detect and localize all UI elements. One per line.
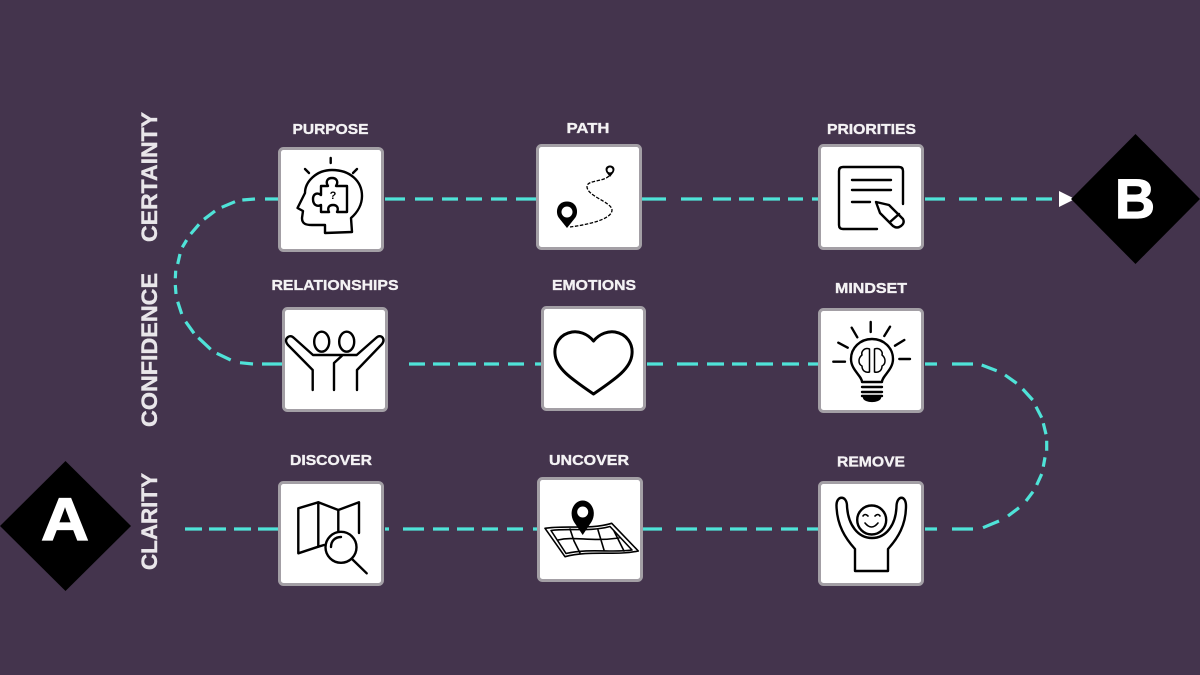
- icon: heart: [555, 332, 632, 394]
- icon: route with pins: [557, 166, 614, 228]
- icon: note and pencil: [839, 167, 904, 229]
- card: purpose: [280, 122, 382, 250]
- end diamond B: [1071, 134, 1200, 264]
- heading: purpose: PURPOSE: [292, 122, 369, 138]
- card: remove: [820, 454, 922, 584]
- side label: confidence: CONFIDENCE: [137, 273, 162, 427]
- card: uncover: [538, 453, 642, 580]
- card: mindset: [820, 281, 922, 412]
- heading: mindset: MINDSET: [835, 281, 907, 297]
- start diamond A: A: [41, 486, 89, 553]
- card: discover: [280, 453, 382, 584]
- card: path: [538, 121, 640, 248]
- card: emotions: [542, 278, 644, 410]
- heading: remove: REMOVE: [837, 454, 905, 470]
- heading: discover: DISCOVER: [290, 453, 373, 469]
- heading: path: PATH: [566, 121, 610, 137]
- icon: light bulb with brain: [833, 322, 910, 401]
- dashed journey path from A to B: [175, 199, 1052, 529]
- heading: relationships: RELATIONSHIPS: [272, 278, 399, 294]
- heading: uncover: UNCOVER: [549, 453, 630, 469]
- arrowhead: [1059, 191, 1075, 207]
- start diamond A: [0, 461, 131, 591]
- card: relationships: [272, 278, 399, 410]
- icon: happy person with raised arms: [836, 498, 906, 571]
- side label: certainty: CERTAINTY: [137, 112, 162, 242]
- icon: two people with raised arms: [286, 332, 384, 390]
- side label: clarity: CLARITY: [137, 473, 162, 570]
- end diamond B: B: [1115, 167, 1155, 230]
- heading: emotions: EMOTIONS: [552, 278, 636, 294]
- icon: map with location pin: [545, 500, 638, 557]
- icon: map with magnifier: [298, 502, 367, 573]
- card: priorities: [820, 122, 922, 248]
- heading: priorities: PRIORITIES: [827, 122, 916, 138]
- icon: head with puzzle piece: ?: [330, 190, 337, 202]
